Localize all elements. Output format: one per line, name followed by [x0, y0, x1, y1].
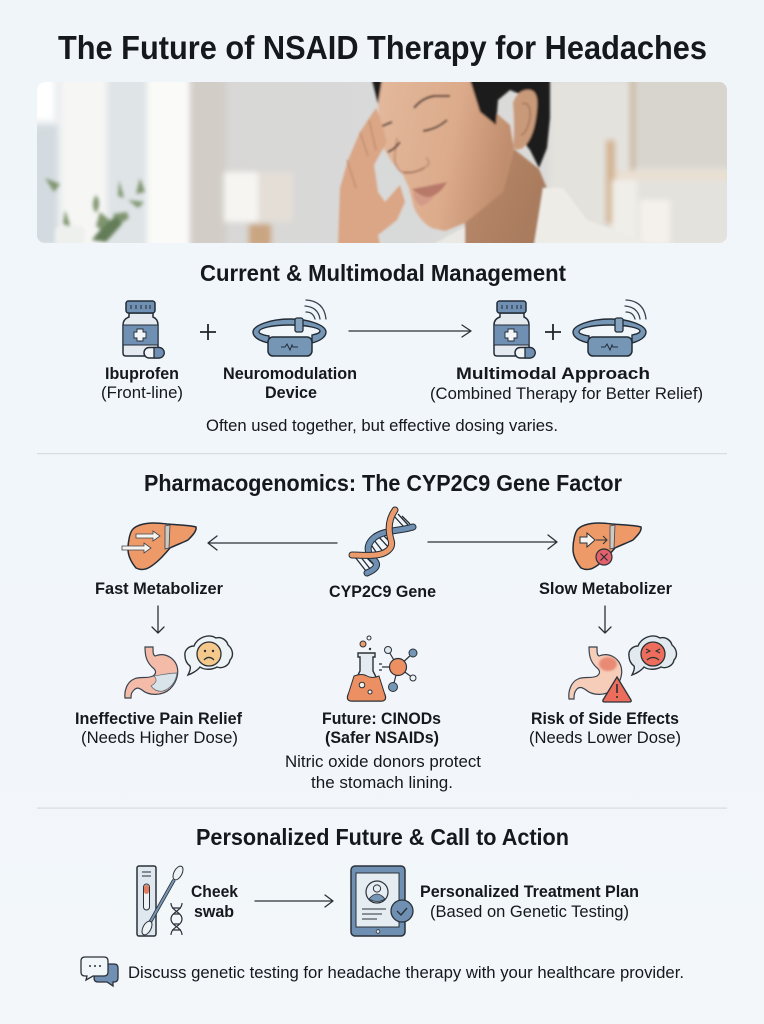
arrow: to multimodal [349, 325, 471, 337]
label: cheek swab [191, 882, 238, 921]
heading: personalized future: Personalized Future & Call to Action [196, 824, 569, 850]
arrow: fast down [152, 606, 164, 633]
title: The Future of NSAID Therapy for Headaches [58, 29, 707, 66]
icon: fast metabolizer liver [122, 523, 196, 569]
label: fast metabolizer: Fast Metabolizer [95, 579, 223, 598]
section: personalized future [81, 824, 684, 986]
label: multimodal approach [430, 364, 703, 403]
note: nitric oxide: the stomach lining. [311, 773, 453, 792]
label: multimodal approach: (Combined Therapy for Better Relief) [430, 384, 703, 403]
icon: plus [200, 324, 216, 340]
note: nitric oxide: Nitric oxide donors protect [285, 752, 481, 771]
section: current and multimodal management [101, 260, 703, 435]
label: future CINODs [322, 709, 441, 747]
label: cheek swab: Cheek [191, 882, 238, 901]
label: neuromodulation device: Neuromodulation [223, 364, 357, 383]
label: personalized treatment plan [420, 882, 639, 921]
label: future CINODs: Future: CINODs [322, 709, 441, 728]
icon: stomach with warning and unwell face [569, 636, 676, 702]
icon: flask and molecule [348, 636, 417, 701]
icon: slow metabolizer liver [573, 523, 641, 569]
arrow: swab to plan [255, 895, 333, 907]
label: front-line: (Front-line) [101, 383, 183, 402]
photo: woman with headache [37, 82, 727, 243]
label: personalized treatment plan: (Based on Genetic Testing) [430, 902, 629, 921]
icon: ibuprofen bottle [123, 301, 164, 358]
icon: cheek swab kit [137, 864, 185, 936]
label: future CINODs: (Safer NSAIDs) [325, 728, 439, 747]
shirt and face [336, 82, 610, 243]
label: slow metabolizer: Slow Metabolizer [539, 579, 672, 598]
label: neuromodulation device: Device [265, 383, 317, 402]
arrow: gene to slow [428, 535, 557, 549]
icon: DNA helix [352, 510, 413, 573]
arrow: gene to fast [208, 536, 337, 550]
label: neuromodulation device [223, 364, 357, 402]
call to action: Discuss genetic testing for headache therapy with your healthcare provider. [128, 963, 684, 982]
label: multimodal approach: Multimodal Approach [456, 364, 650, 383]
label: risk of side effects [529, 709, 681, 747]
heading: current management: Current & Multimodal Management [200, 260, 566, 286]
label: risk of side effects: (Needs Lower Dose) [529, 728, 681, 747]
label: personalized treatment plan: Personalized Treatment Plan [420, 882, 639, 901]
heading: pharmacogenomics: Pharmacogenomics: The CYP2C9 Gene Factor [144, 470, 622, 496]
label: ineffective pain relief: Ineffective Pain Relief [75, 709, 242, 728]
icon: stomach with sad face [125, 636, 232, 698]
label: ibuprofen: Ibuprofen [105, 364, 179, 383]
icon: device combined [573, 300, 646, 356]
icon: plus combined [545, 324, 561, 340]
arrow: slow down [599, 606, 611, 633]
note: dosing varies: Often used together, but effective dosing varies. [206, 416, 558, 435]
icon: chat bubbles [81, 957, 118, 986]
label: ineffective pain relief: (Needs Higher Dose) [81, 728, 238, 747]
section: pharmacogenomics [75, 470, 681, 792]
icon: bottle combined [494, 301, 535, 358]
label: ineffective pain relief [75, 709, 242, 747]
note: nitric oxide [285, 752, 481, 792]
icon: neuromodulation device [253, 300, 326, 356]
label: CYP2C9 gene: CYP2C9 Gene [329, 582, 436, 601]
icon: tablet with profile [351, 866, 413, 936]
label: cheek swab: swab [194, 902, 234, 921]
label: risk of side effects: Risk of Side Effects [531, 709, 679, 728]
